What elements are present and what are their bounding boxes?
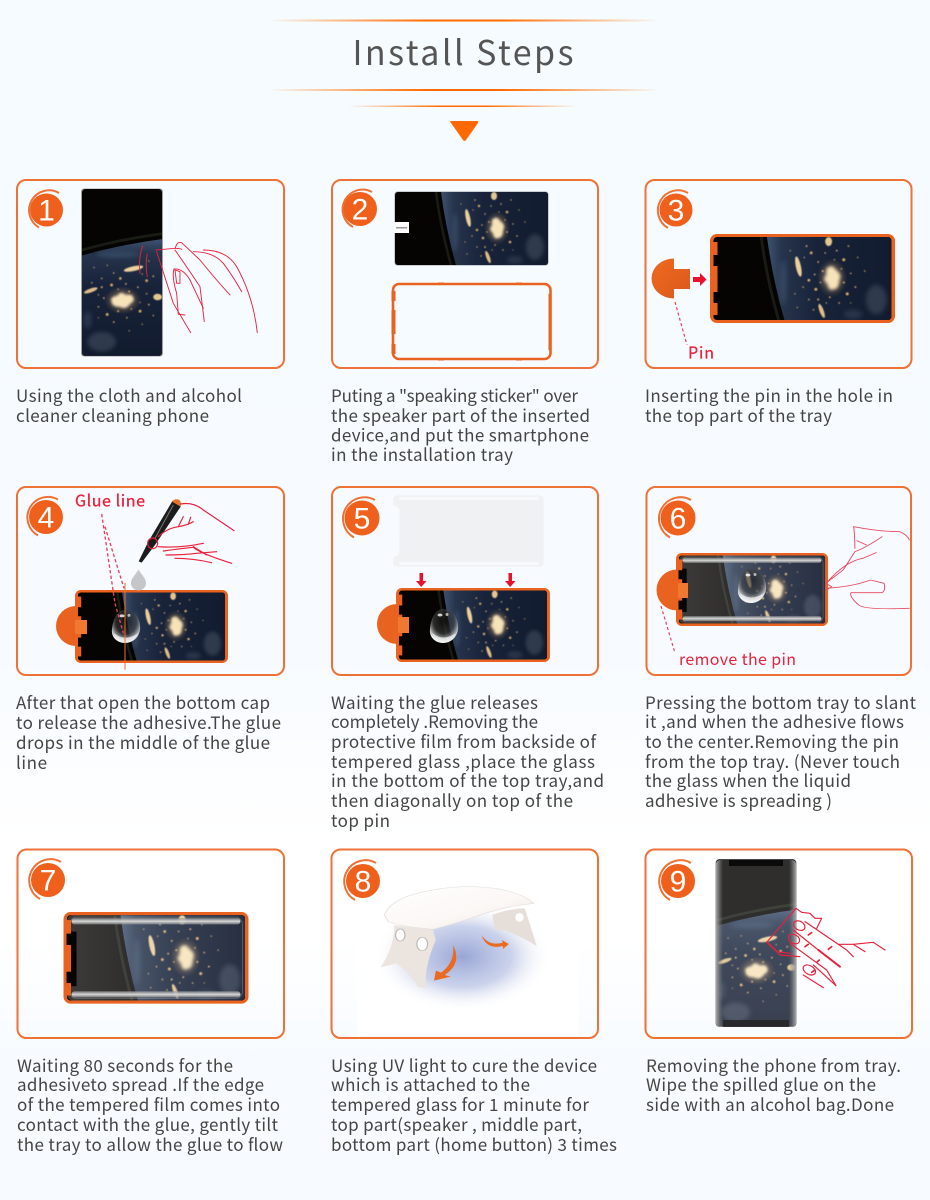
panel 5: place glass — [332, 487, 598, 675]
step 1 text — [16, 382, 242, 427]
step 5 text — [331, 689, 604, 832]
icon: pressing hand — [826, 527, 909, 609]
glue line dashes — [102, 514, 125, 670]
step 6 text — [645, 689, 917, 812]
badge 9: 9 — [670, 866, 686, 898]
step 5 text: top pin — [331, 807, 390, 832]
label: Pin: Pin — [688, 340, 714, 364]
step 5 text: protective film from backside of — [331, 728, 597, 753]
badge 5: 5 — [354, 502, 370, 536]
step 1 text: Using the cloth and alcohol — [16, 382, 242, 407]
tray with pin and drop — [377, 588, 550, 662]
title: Install Steps: Install Steps — [352, 26, 574, 75]
step 7 text — [17, 1052, 283, 1156]
step 5 text: Waiting the glue releases — [331, 689, 538, 714]
pin leader line — [661, 606, 675, 653]
step 2 text — [331, 382, 590, 466]
step 6 text: from the top tray. (Never touch — [645, 748, 900, 773]
step 2 text: in the installation tray — [331, 441, 513, 466]
step 5 text: then diagonally on top of the — [331, 787, 573, 812]
panel 4: glue drop — [17, 487, 284, 675]
step 6 text: to the center.Removing the pin — [645, 728, 899, 753]
panel 3: insert pin — [646, 180, 912, 368]
phone landscape with speaking sticker — [394, 192, 548, 266]
step 1 text: cleaner cleaning phone — [16, 402, 209, 427]
badge 1: 1 — [38, 194, 55, 228]
panel 2: sticker and tray — [332, 180, 598, 368]
icon: glue droplet — [131, 570, 146, 590]
step 6 text: adhesive is spreading ) — [645, 787, 832, 812]
step 5 text: in the bottom of the top tray,and — [331, 767, 604, 792]
step 4 text: line — [16, 749, 47, 774]
badge 7 — [29, 859, 65, 899]
step 8 text — [331, 1052, 617, 1156]
step 8 text: Using UV light to cure the device — [331, 1052, 597, 1077]
phone with glass — [716, 859, 796, 1027]
step 2 text: Puting a "speaking sticker" over — [331, 382, 578, 407]
step 9 text: Wipe the spilled glue on the — [646, 1071, 876, 1096]
step 4 text: After that open the bottom cap — [16, 689, 270, 714]
badge 3: 3 — [668, 194, 684, 228]
tray with phone — [710, 234, 895, 323]
badge 4 — [27, 497, 63, 536]
empty installation tray — [392, 282, 552, 360]
step 3 text: Inserting the pin in the hole in — [645, 382, 893, 407]
step 9 text — [646, 1052, 901, 1116]
arrow: down triangle — [450, 121, 478, 141]
panel 9: finish and wipe — [646, 850, 912, 1038]
step 3 text: the top part of the tray — [645, 402, 832, 427]
step 4 text — [16, 689, 281, 774]
step 8 text: which is attached to the — [331, 1071, 530, 1096]
step 5 text: completely .Removing the — [331, 708, 538, 733]
label: Glue line: Glue line — [75, 488, 145, 512]
icon: UV lamp — [357, 883, 578, 1036]
panel 6: remove pin — [646, 487, 911, 675]
panel 8: UV lamp — [332, 850, 598, 1038]
step 7 text: of the tempered film comes into — [17, 1091, 280, 1116]
step 3 text — [645, 382, 893, 427]
step 4 text: to release the adhesive.The glue — [16, 709, 281, 734]
panel 7: wait for spread — [18, 850, 284, 1038]
badge 2 — [343, 190, 377, 227]
arrows: place down — [416, 573, 516, 587]
badge 8: 8 — [355, 866, 371, 898]
label: remove the pin: remove the pin — [679, 646, 796, 670]
phone portrait — [81, 188, 163, 356]
badge 6 — [659, 497, 696, 538]
badge 7: 7 — [40, 864, 56, 898]
step 2 text: device,and put the smartphone — [331, 422, 589, 446]
step 5 text: tempered glass ,place the glass — [331, 748, 595, 773]
step 7 text: adhesiveto spread .If the edge — [17, 1071, 264, 1096]
badge 8 — [344, 860, 380, 900]
icon: hand with cloth — [767, 908, 885, 988]
icon: hand wiping — [140, 242, 257, 333]
tray with glass and pin — [656, 553, 828, 626]
pin — [652, 258, 690, 298]
badge 5 — [343, 497, 380, 538]
step 6 text: Pressing the bottom tray to slant — [645, 689, 917, 714]
step 8 text: bottom part (home button) 3 times — [331, 1131, 617, 1156]
badge 1 — [29, 190, 63, 228]
badge 9 — [659, 860, 695, 900]
panel 1: clean phone — [17, 180, 284, 368]
step 7 text: the tray to allow the glue to flow — [17, 1131, 283, 1156]
step 9 text: side with an alcohol bag.Done — [646, 1091, 894, 1116]
badge 4: 4 — [38, 502, 54, 534]
tray with glass — [64, 912, 248, 1004]
step 7 text: Waiting 80 seconds for the — [17, 1052, 233, 1077]
pin leader line — [675, 302, 687, 345]
tray with pin and drop — [56, 590, 228, 663]
icon: hand with glue pen — [139, 499, 234, 563]
arrow: into hole — [693, 273, 706, 286]
step 8 text: top part(speaker , middle part, — [331, 1111, 582, 1136]
step 6 text: it ,and when the adhesive flows — [645, 708, 904, 733]
badge 2: 2 — [352, 194, 368, 226]
badge 3 — [658, 190, 692, 228]
tempered glass film — [393, 495, 544, 567]
badge 6: 6 — [670, 502, 686, 536]
step 9 text: Removing the phone from tray. — [646, 1052, 901, 1077]
step 4 text: drops in the middle of the glue — [16, 729, 270, 754]
step 7 text: contact with the glue, gently tilt — [17, 1111, 279, 1136]
step 6 text: the glass when the liquid — [645, 767, 851, 792]
step 2 text: the speaker part of the inserted — [331, 402, 590, 427]
step 8 text: tempered glass for 1 minute for — [331, 1091, 589, 1116]
